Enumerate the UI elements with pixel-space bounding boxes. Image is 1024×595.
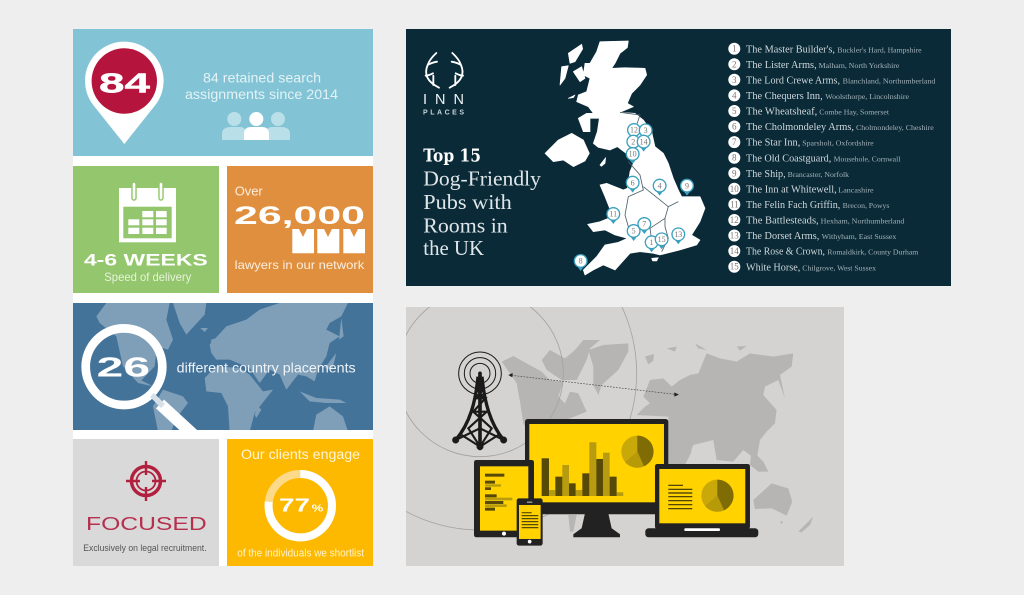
icon: tablet [474, 460, 534, 537]
map: UK with pub markers: 9 [685, 181, 689, 190]
map: UK with pub markers: 10 [629, 150, 637, 159]
list: 15 pubs: 1 [732, 44, 737, 54]
text: different country placements: different country placements [177, 359, 356, 375]
list: 15 pubs: Cholmondeley, Cheshire [856, 124, 934, 132]
panel: devices and tower [406, 307, 844, 566]
list: 15 pubs [728, 43, 936, 273]
map: UK with pub markers: 3 [644, 126, 648, 135]
map: UK with pub markers: 6 [631, 178, 635, 187]
icon: magnifying glass with 26: 26 [97, 352, 150, 383]
icon: radio tower [452, 352, 507, 450]
panel: lawyers network [227, 166, 373, 293]
panel: top 15 dog-friendly pubs [406, 29, 951, 286]
list: 15 pubs: 9 [732, 168, 737, 178]
list: 15 pubs: Malham, North Yorkshire [819, 62, 899, 70]
text: of the individuals we shortlist: of the individuals we shortlist [237, 548, 364, 560]
list: 15 pubs: 13 [730, 230, 739, 240]
text: retained search: 84 retained search [203, 70, 321, 86]
list: 15 pubs: The Ship, [746, 169, 786, 180]
map: UK with pub markers: 15 [658, 235, 666, 244]
list: 15 pubs: The Felin Fach Griffin, [746, 200, 840, 211]
map: UK with pub markers: 11 [609, 210, 617, 219]
map: UK with pub markers: 13 [674, 230, 682, 239]
map: UK with pub markers: 14 [640, 137, 648, 146]
list: 15 pubs: 11 [730, 199, 739, 209]
list: 15 pubs: The Lord Crewe Arms, [746, 75, 840, 86]
list: 15 pubs: 8 [732, 153, 737, 163]
list: 15 pubs: 7 [732, 137, 737, 147]
icon: magnifying glass with 26 [86, 328, 198, 439]
text: speed of delivery: Speed of delivery [104, 270, 191, 284]
list: 15 pubs: Romaldkirk, County Durham [827, 249, 919, 257]
list: 15 pubs: The Master Builder's, [746, 44, 835, 55]
icon: calendar [119, 184, 176, 242]
text: 26,000: 26,000 [234, 202, 365, 230]
list: 15 pubs: Blanchland, Northumberland [843, 77, 936, 85]
list: 15 pubs: 4 [732, 90, 737, 100]
heading: top 15 dog-friendly pubs with rooms in the UK: Pubs with [423, 190, 512, 214]
map: UK with pub markers: 7 [642, 220, 646, 229]
map: UK with pub markers: 12 [630, 126, 638, 135]
panel: country placements [73, 303, 373, 439]
text: our clients engage: Our clients engage [241, 446, 360, 462]
list: 15 pubs: 14 [730, 246, 739, 256]
map: UK with pub markers: 5 [632, 227, 636, 236]
list: 15 pubs: The Lister Arms, [746, 60, 817, 71]
logo: inn places [423, 53, 464, 116]
signal rings [406, 307, 637, 530]
text: retained search [185, 70, 338, 102]
heading: top 15 dog-friendly pubs with rooms in the UK: Top 15 [423, 146, 481, 167]
list: 15 pubs: 5 [732, 106, 737, 116]
list: 15 pubs: Sparsholt, Oxfordshire [802, 140, 874, 148]
icon: three suits [292, 229, 365, 253]
logo: inn places: PLACES [423, 109, 464, 116]
list: 15 pubs: Combe Hay, Somerset [819, 109, 889, 117]
list: 15 pubs: White Horse, [746, 262, 800, 273]
arrow: dotted connection [508, 373, 679, 397]
list: 15 pubs: Chilgrove, West Sussex [802, 264, 877, 272]
heading: top 15 dog-friendly pubs with rooms in the UK: Dog-Friendly [423, 167, 542, 191]
list: 15 pubs: 6 [732, 122, 737, 132]
text: lawyers in our network: lawyers in our network [235, 258, 365, 272]
list: 15 pubs: 12 [730, 215, 739, 225]
list: 15 pubs: Woolsthorpe, Lincolnshire [825, 93, 909, 101]
list: 15 pubs: The Star Inn, [746, 138, 800, 149]
panel: speed of delivery [73, 166, 219, 293]
text: 4-6 weeks: 4-6 WEEKS [84, 252, 208, 270]
list: 15 pubs: The Old Coastguard, [746, 153, 831, 164]
list: 15 pubs: Withyham, East Sussex [822, 233, 897, 241]
list: 15 pubs: 10 [730, 184, 739, 194]
icon: phone [517, 498, 543, 546]
chart: 77 percent donut: 77 [279, 496, 310, 516]
list: 15 pubs: 15 [730, 262, 739, 272]
chart: 77 percent donut: % [312, 504, 324, 515]
list: 15 pubs: The Wheatsheaf, [746, 107, 817, 118]
list: 15 pubs: Hexham, Northumberland [821, 218, 905, 226]
map: UK with pub markers: 4 [658, 181, 662, 190]
map: UK with pub markers: 8 [579, 257, 583, 266]
list: 15 pubs: Brecon, Powys [843, 202, 890, 210]
world map [502, 340, 813, 532]
icon: red location pin with 84 [85, 42, 164, 144]
heading: top 15 dog-friendly pubs with rooms in the UK: Rooms in [423, 213, 508, 237]
chart: 77 percent donut [269, 474, 332, 537]
map: UK with pub markers [545, 41, 705, 275]
icon: red target [126, 461, 166, 501]
text: exclusively on legal recruitment: Exclusively on legal recruitment. [83, 543, 207, 554]
heading: top 15 dog-friendly pubs with rooms in the UK: the UK [423, 236, 484, 260]
text: retained search: assignments since 2014 [185, 86, 338, 102]
text: focused: FOCUSED [86, 514, 207, 534]
text: over: Over [235, 184, 263, 199]
panel: focused [73, 439, 219, 566]
world map [96, 303, 348, 431]
list: 15 pubs: The Cholmondeley Arms, [746, 122, 854, 133]
list: 15 pubs: 3 [732, 75, 737, 85]
map: UK with pub markers: 1 [650, 238, 654, 247]
list: 15 pubs: 2 [732, 59, 737, 69]
list: 15 pubs: The Inn at Whitewell, [746, 184, 837, 195]
list: 15 pubs: Mousehole, Cornwall [834, 155, 900, 163]
list: 15 pubs: Brancaster, Norfolk [788, 171, 850, 179]
logo: inn places: INN [423, 92, 464, 108]
panel: 84 retained search assignments [73, 29, 373, 156]
list: 15 pubs: Buckler's Hard, Hampshire [837, 46, 922, 54]
icon: desktop monitor with charts [525, 419, 668, 537]
icon: laptop [645, 464, 758, 537]
icon: three people [222, 112, 290, 140]
map: UK with pub markers: 2 [631, 137, 635, 146]
icon: red location pin with 84: 84 [99, 68, 151, 99]
heading: top 15 dog-friendly pubs with rooms in the UK [423, 146, 542, 260]
list: 15 pubs: The Rose & Crown, [746, 247, 825, 258]
list: 15 pubs: Lancashire [838, 186, 874, 194]
list: 15 pubs: The Battlesteads, [746, 216, 819, 227]
list: 15 pubs: The Chequers Inn, [746, 91, 823, 102]
panel: clients engage [227, 439, 373, 566]
list: 15 pubs: The Dorset Arms, [746, 231, 819, 242]
